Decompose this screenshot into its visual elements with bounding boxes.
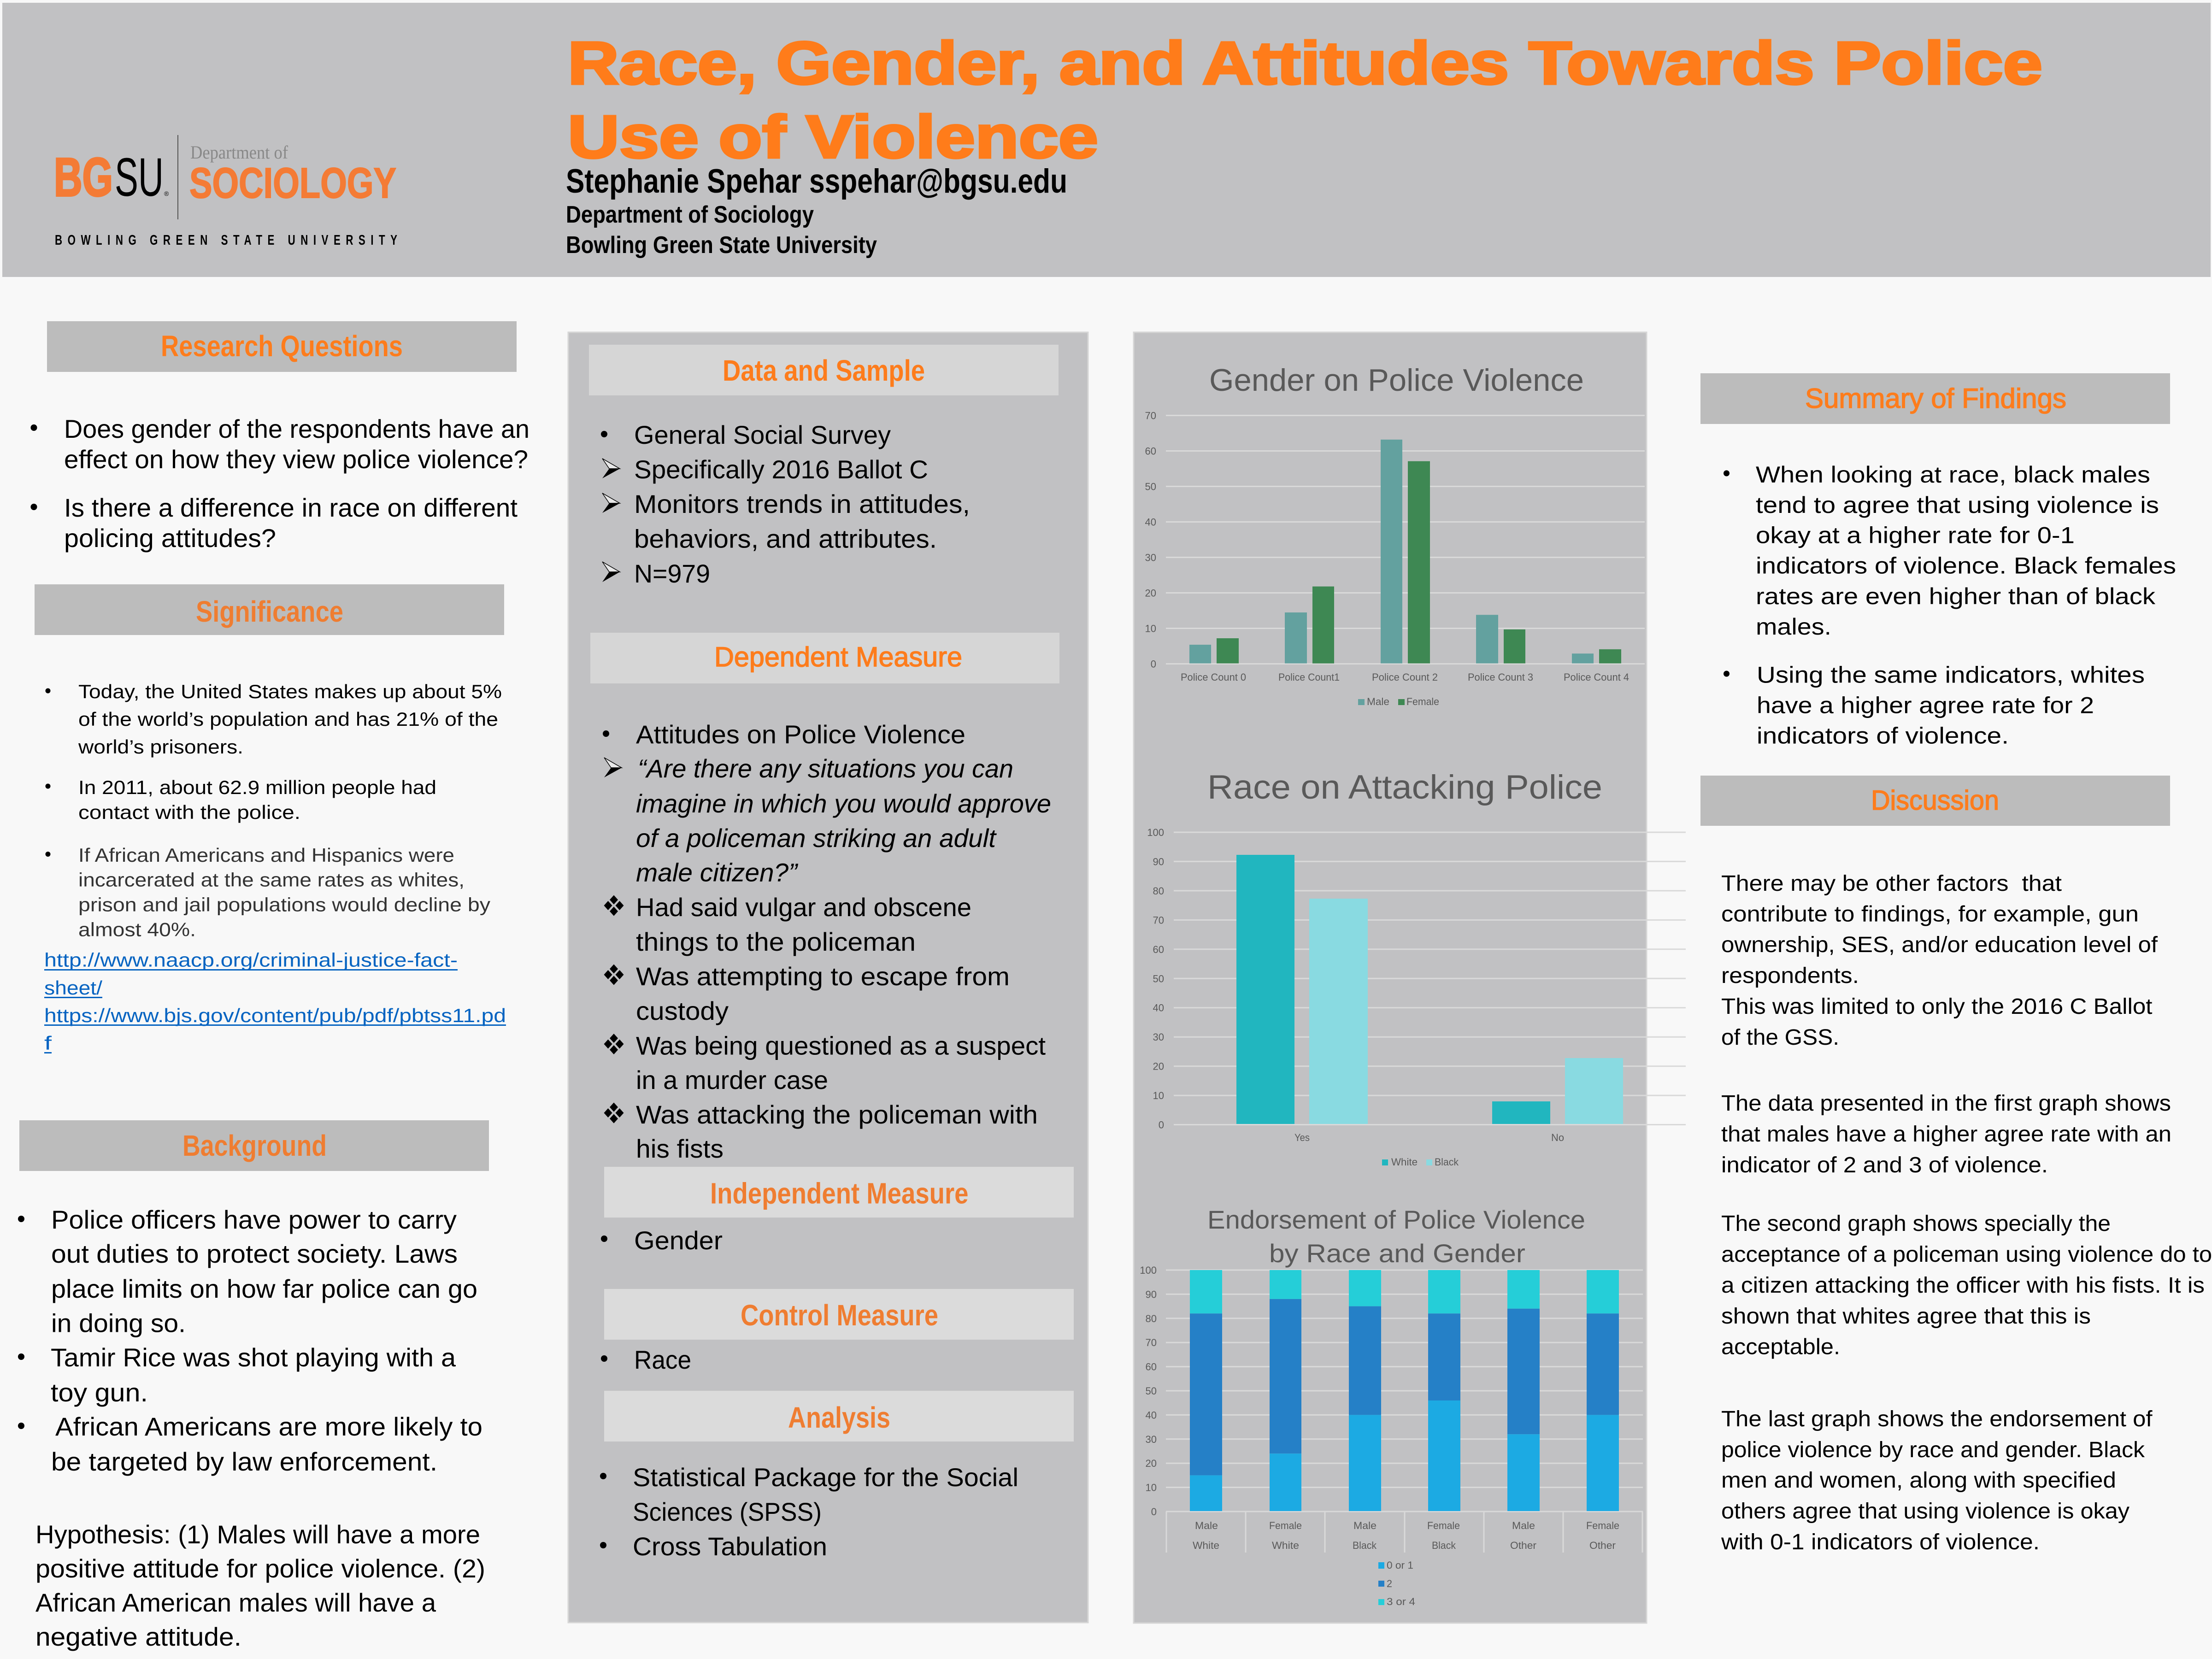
stacked bar chart: endorsement of police violence: 80: [1146, 1313, 1157, 1324]
logo: BGSU Department of Sociology: [54, 135, 397, 248]
section: dependent measure: of a policeman striking an adult: [636, 824, 997, 853]
header banner: [2, 3, 2211, 277]
panel: summary of findings: indicators of violence. Black females: [1756, 553, 2176, 579]
section: independent measure: Independent Measure: [710, 1177, 969, 1210]
bar chart: gender on police violence: 30: [1145, 552, 1156, 563]
stacked bar chart: endorsement of police violence: Female: [1586, 1520, 1619, 1531]
section: dependent measure: “Are there any situations you can: [638, 754, 1013, 783]
panel: background: out duties to protect society. Laws: [51, 1239, 458, 1268]
section: dependent measure: Dependent Measure: [714, 641, 962, 672]
section: dependent measure: Was attempting to escape from: [636, 962, 1010, 991]
panel: summary of findings: have a higher agree rate for 2: [1757, 692, 2094, 718]
bar chart: gender on police violence: Police Count 4: [1564, 671, 1629, 683]
stacked bar chart: endorsement of police violence: Male: [1512, 1520, 1535, 1531]
panel: discussion: [1700, 776, 2212, 1554]
section: dependent measure: Was attacking the policeman with: [636, 1100, 1038, 1129]
bar chart: gender on police violence: Police Count 0: [1181, 671, 1246, 683]
bar chart: race on attacking police: 100: [1147, 827, 1164, 838]
panel: research questions: effect on how they view police violence?: [64, 445, 528, 474]
panel: summary of findings: tend to agree that using violence is: [1756, 492, 2159, 518]
stacked bar chart: endorsement of police violence: 70: [1146, 1337, 1157, 1348]
bar chart: gender on police violence: Police Count1: [1278, 671, 1340, 683]
reference links: f: [44, 1032, 52, 1054]
panel: significance: world’s prisoners.: [78, 736, 243, 758]
panel: significance: In 2011, about 62.9 million people had: [78, 777, 436, 798]
bar chart: race on attacking police: 40: [1153, 1002, 1164, 1014]
panel: significance: [35, 584, 506, 1054]
bar chart: race on attacking police: 70: [1153, 914, 1164, 926]
panel: summary of findings: rates are even higher than of black: [1756, 583, 2156, 609]
panel: research questions: policing attitudes?: [64, 524, 276, 553]
stacked bar chart: endorsement of police violence: 10: [1146, 1482, 1157, 1494]
section: data and sample: behaviors, and attributes.: [634, 524, 937, 553]
bar chart: race on attacking police: 80: [1153, 885, 1164, 897]
panel: discussion: men and women, along with specified: [1721, 1468, 2116, 1493]
panel: discussion: The data presented in the first graph shows: [1721, 1091, 2171, 1116]
reference links: sheet/: [44, 977, 102, 999]
bar chart: gender on police violence: 0: [1151, 658, 1156, 670]
section: data and sample: General Social Survey: [634, 420, 891, 449]
section: analysis: Analysis: [788, 1401, 890, 1434]
author and affiliation: Department of Sociology: [566, 201, 814, 228]
stacked bar chart: endorsement of police violence: White: [1272, 1540, 1299, 1551]
author and affiliation: Stephanie Spehar sspehar@bgsu.edu: [566, 163, 1067, 200]
section: dependent measure: Attitudes on Police Violence: [636, 720, 965, 749]
panel: discussion: that males have a higher agree rate with an: [1721, 1122, 2171, 1147]
stacked bar chart: endorsement of police violence: 30: [1146, 1434, 1157, 1445]
section: dependent measure: Was being questioned as a suspect: [636, 1031, 1046, 1060]
stacked bar chart: endorsement of police violence: Male: [1353, 1520, 1377, 1531]
legend: [1378, 1559, 1415, 1607]
panel: discussion: This was limited to only the 2016 C Ballot: [1721, 994, 2152, 1019]
legend: White: [1391, 1156, 1418, 1168]
legend: 0 or 1: [1387, 1559, 1413, 1571]
section: control measure: [601, 1289, 1074, 1374]
bar chart: race on attacking police: 0: [1159, 1119, 1164, 1131]
section: analysis: Cross Tabulation: [633, 1532, 827, 1561]
panel: significance: of the world’s population and has 21% of the: [78, 708, 498, 730]
hypothesis: African American males will have a: [35, 1588, 436, 1617]
section: dependent measure: male citizen?”: [636, 858, 798, 887]
panel: background: Background: [182, 1129, 327, 1162]
author and affiliation: Bowling Green State University: [566, 232, 877, 259]
bar chart: race on attacking police: 90: [1153, 856, 1164, 867]
section: analysis: Sciences (SPSS): [633, 1497, 822, 1526]
hypothesis: [35, 1520, 485, 1651]
stacked bar chart: endorsement of police violence: by Race and Gender: [1269, 1239, 1525, 1268]
logo: BGSU Department of Sociology: ®: [164, 190, 169, 197]
bar chart: gender on police violence: Police Count 3: [1468, 671, 1533, 683]
panel: background: toy gun.: [51, 1378, 148, 1407]
legend: 2: [1387, 1578, 1392, 1589]
bar chart: gender on police violence: 10: [1145, 623, 1156, 634]
bar chart: race on attacking police: Race on Attacking Police: [1207, 769, 1602, 806]
panel: background: [18, 1120, 489, 1651]
section: independent measure: Gender: [634, 1226, 723, 1255]
panel: background: Police officers have power to carry: [51, 1205, 457, 1234]
panel: significance: Significance: [196, 595, 343, 628]
logo: BGSU Department of Sociology: SOCIOLOGY: [189, 159, 396, 207]
panel: discussion: The second graph shows specially the: [1721, 1212, 2111, 1236]
panel: discussion: indicator of 2 and 3 of violence.: [1721, 1153, 2048, 1177]
panel: summary of findings: When looking at race, black males: [1756, 462, 2150, 488]
stacked bar chart: endorsement of police violence: Other: [1510, 1540, 1536, 1551]
stacked bar chart: endorsement of police violence: 40: [1146, 1409, 1157, 1421]
stacked bar chart: endorsement of police violence: 60: [1146, 1361, 1157, 1373]
legend: [1358, 696, 1439, 707]
panel: charts column: [1134, 332, 1686, 1623]
section: dependent measure: things to the policeman: [636, 927, 916, 956]
panel: background: in doing so.: [51, 1309, 186, 1337]
bar chart: race on attacking police: 10: [1153, 1090, 1164, 1101]
bar chart: race on attacking police: 30: [1153, 1031, 1164, 1043]
logo: BGSU Department of Sociology: BG: [54, 147, 113, 208]
panel: summary of findings: males.: [1756, 614, 1831, 640]
panel: background: Tamir Rice was shot playing with a: [51, 1343, 456, 1372]
section: independent measure: [601, 1167, 1074, 1255]
panel: background: place limits on how far police can go: [51, 1274, 477, 1303]
panel: methods column: [568, 332, 1088, 1623]
logo: BGSU Department of Sociology: Department of: [190, 142, 288, 163]
panel: research questions: [30, 321, 529, 553]
panel: discussion: There may be other factors that: [1721, 871, 2062, 896]
stacked bar chart: endorsement of police violence: Other: [1589, 1540, 1616, 1551]
panel: discussion: Discussion: [1871, 785, 1999, 816]
panel: significance: incarcerated at the same rates as whites,: [78, 869, 465, 890]
bar chart: gender on police violence: 70: [1145, 410, 1156, 421]
logo: BGSU Department of Sociology: SU: [115, 147, 164, 208]
stacked bar chart: endorsement of police violence: 90: [1146, 1288, 1157, 1300]
panel: significance: almost 40%.: [78, 919, 196, 940]
panel: discussion: contribute to findings, for example, gun: [1721, 902, 2139, 926]
bar chart: race on attacking police: [1147, 769, 1686, 1168]
panel: summary of findings: [1700, 373, 2176, 748]
panel: research questions: Research Questions: [161, 329, 403, 363]
bar chart: gender on police violence: 20: [1145, 587, 1156, 599]
legend: Male: [1367, 696, 1389, 707]
section: control measure: Race: [634, 1345, 691, 1374]
bar chart: race on attacking police: Yes: [1294, 1132, 1310, 1143]
bar chart: race on attacking police: 60: [1153, 944, 1164, 955]
section: data and sample: N=979: [634, 559, 710, 588]
stacked bar chart: endorsement of police violence: White: [1193, 1540, 1219, 1551]
section: data and sample: Data and Sample: [723, 354, 925, 387]
panel: discussion: respondents.: [1721, 964, 1859, 988]
panel: significance: contact with the police.: [78, 801, 300, 823]
stacked bar chart: endorsement of police violence: Black: [1353, 1540, 1377, 1551]
bar chart: gender on police violence: 60: [1145, 445, 1156, 457]
panel: discussion: with 0-1 indicators of violence.: [1721, 1530, 2040, 1554]
panel: significance: If African Americans and Hispanics were: [78, 844, 454, 866]
panel: discussion: acceptance of a policeman using violence do to: [1721, 1242, 2212, 1267]
panel: research questions: Does gender of the respondents have an: [64, 414, 529, 443]
legend: Black: [1435, 1156, 1459, 1168]
panel: background: African Americans are more likely to: [55, 1412, 482, 1441]
legend: 3 or 4: [1387, 1596, 1415, 1607]
stacked bar chart: endorsement of police violence: 0: [1151, 1506, 1157, 1518]
section: control measure: Control Measure: [741, 1299, 938, 1332]
section: analysis: Statistical Package for the Social: [633, 1463, 1018, 1492]
section: data and sample: [589, 345, 1059, 588]
bar chart: gender on police violence: Gender on Police Violence: [1209, 363, 1584, 398]
section: dependent measure: custody: [636, 996, 729, 1025]
bar chart: race on attacking police: 20: [1153, 1061, 1164, 1072]
title: Use of Violence: [568, 103, 1098, 171]
title: Race, Gender, and Attitudes Towards Police: [568, 29, 2042, 97]
bar chart: race on attacking police: 50: [1153, 973, 1164, 984]
panel: background: be targeted by law enforcement.: [51, 1447, 437, 1476]
panel: research questions: Is there a difference in race on different: [64, 493, 518, 522]
panel: summary of findings: Summary of Findings: [1805, 383, 2066, 414]
section: dependent measure: his fists: [636, 1134, 724, 1163]
author and affiliation: [566, 163, 1067, 259]
title: [568, 29, 2042, 171]
stacked bar chart: endorsement of police violence: 100: [1140, 1265, 1157, 1276]
stacked bar chart: endorsement of police violence: Female: [1427, 1520, 1460, 1531]
panel: discussion: The last graph shows the endorsement of: [1721, 1407, 2153, 1431]
panel: discussion: police violence by race and gender. Black: [1721, 1438, 2145, 1462]
reference links: http://www.naacp.org/criminal-justice-fact-: [44, 949, 458, 971]
section: dependent measure: Had said vulgar and obscene: [636, 893, 971, 922]
hypothesis: Hypothesis: (1) Males will have a more: [35, 1520, 480, 1549]
section: dependent measure: [590, 633, 1059, 1163]
stacked bar chart: endorsement of police violence: Endorsement of Police Violence: [1207, 1205, 1585, 1234]
bar chart: race on attacking police: No: [1551, 1132, 1564, 1143]
panel: discussion: a citizen attacking the officer with his fists. It is: [1721, 1273, 2205, 1298]
panel: summary of findings: okay at a higher rate for 0-1: [1756, 523, 2075, 548]
section: data and sample: Specifically 2016 Ballot C: [634, 455, 928, 484]
bar chart: gender on police violence: Police Count 2: [1372, 671, 1438, 683]
section: dependent measure: in a murder case: [636, 1065, 828, 1094]
stacked bar chart: endorsement of police violence: Black: [1432, 1540, 1456, 1551]
stacked bar chart: endorsement of police violence: Male: [1195, 1520, 1218, 1531]
panel: discussion: of the GSS.: [1721, 1025, 1839, 1050]
stacked bar chart: endorsement of police violence: Female: [1269, 1520, 1302, 1531]
bar chart: gender on police violence: 40: [1145, 516, 1156, 528]
panel: significance: Today, the United States makes up about 5%: [78, 681, 502, 702]
section: analysis: [600, 1391, 1074, 1561]
bar chart: gender on police violence: [1145, 363, 1645, 707]
hypothesis: positive attitude for police violence. (2): [35, 1554, 485, 1583]
legend: Female: [1406, 696, 1439, 707]
logo: BGSU Department of Sociology: BOWLING GREEN STATE UNIVERSITY: [55, 232, 397, 248]
section: data and sample: Monitors trends in attitudes,: [634, 489, 970, 518]
stacked bar chart: endorsement of police violence: 50: [1146, 1385, 1157, 1397]
panel: discussion: acceptable.: [1721, 1335, 1840, 1359]
stacked bar chart: endorsement of police violence: [1140, 1205, 1643, 1607]
bar chart: gender on police violence: 50: [1145, 481, 1156, 492]
reference links: [44, 949, 506, 1054]
panel: significance: prison and jail populations would decline by: [78, 894, 490, 915]
panel: discussion: shown that whites agree that this is: [1721, 1304, 2091, 1329]
legend: [1382, 1156, 1459, 1168]
panel: discussion: others agree that using violence is okay: [1721, 1499, 2130, 1524]
hypothesis: negative attitude.: [35, 1622, 241, 1651]
panel: summary of findings: Using the same indicators, whites: [1757, 662, 2145, 688]
panel: summary of findings: indicators of violence.: [1757, 723, 2009, 748]
stacked bar chart: endorsement of police violence: 20: [1146, 1458, 1157, 1469]
panel: discussion: ownership, SES, and/or education level of: [1721, 933, 2158, 957]
section: dependent measure: imagine in which you would approve: [636, 789, 1051, 818]
reference links: https://www.bjs.gov/content/pub/pdf/pbtss11.pd: [44, 1005, 506, 1026]
